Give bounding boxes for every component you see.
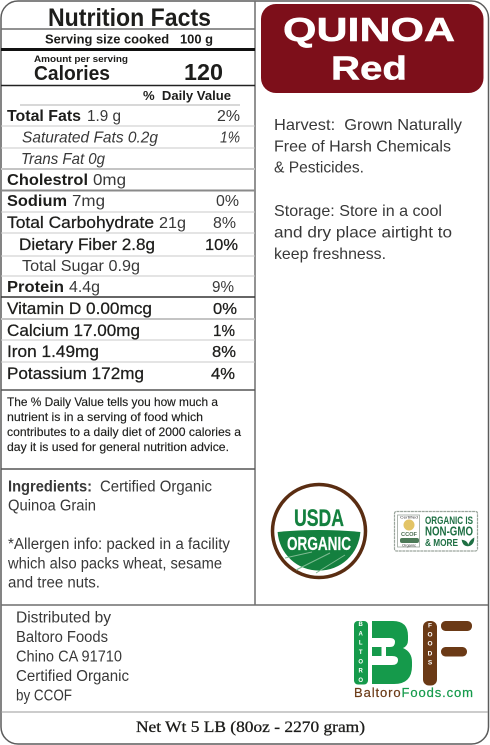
logo: baltoro foods: O	[427, 640, 433, 648]
logo: baltoro foods: A	[359, 632, 364, 638]
panel: ingredients: and tree nuts.	[8, 575, 100, 592]
row: cholesterol	[7, 172, 126, 189]
panel: ingredients: Quinoa Grain	[8, 498, 96, 515]
row: saturated fats	[22, 130, 240, 146]
harvest text: & Pesticides.	[274, 160, 364, 177]
banner: quinoa red: Red	[331, 50, 407, 86]
panel: ingredients	[7, 479, 230, 592]
badge: ccof organic non-gmo: ORGANIC IS	[425, 515, 473, 527]
daily value footnote	[7, 395, 241, 454]
logo: baltoro foods: D	[428, 650, 433, 658]
daily value footnote: The % Daily Value tells you how much a	[7, 395, 218, 409]
panel: nutrition facts	[1, 1, 255, 605]
storage text: Storage: Store in a cool	[274, 203, 442, 220]
logo: baltoro foods: O	[427, 632, 433, 638]
storage text: keep freshness.	[274, 246, 386, 263]
icon: usda organic seal: USDA	[294, 505, 344, 532]
serving size: Serving size cooked 100 g	[45, 32, 213, 46]
logo: baltoro foods: T	[359, 650, 363, 656]
panel: ingredients: Certified Organic	[100, 479, 212, 496]
row: sodium: Sodium	[7, 193, 67, 210]
distributor text: Distributed by	[16, 610, 111, 626]
heading: nutrition facts: Nutrition Facts	[48, 4, 211, 32]
row: total carbohydrate: 21g	[159, 215, 186, 232]
badge: ccof organic non-gmo: Organic	[402, 544, 416, 548]
calories: Calories	[34, 63, 110, 85]
row: total carbohydrate	[7, 214, 236, 232]
row: dietary fiber: 10%	[205, 237, 238, 254]
row: cholesterol: Cholestrol	[7, 172, 88, 189]
logo: baltoro foods	[354, 621, 473, 700]
harvest text: Free of Harsh Chemicals	[274, 139, 451, 156]
distributor text: Chino CA 91710	[16, 649, 122, 666]
row: iron: 8%	[212, 344, 236, 361]
badge: ccof organic non-gmo	[394, 512, 478, 551]
row: protein: 4.4g	[69, 279, 100, 296]
row: total fats: 1.9 g	[87, 108, 121, 125]
storage text: and dry place airtight to	[274, 225, 452, 242]
logo: baltoro foods: L	[359, 640, 363, 646]
row: calcium: Calcium 17.00mg	[7, 322, 140, 340]
row: dietary fiber: Dietary Fiber 2.8g	[19, 236, 155, 254]
panel: ingredients: which also packs wheat, sesame	[7, 556, 222, 573]
banner: quinoa red: QUINOA	[283, 11, 455, 48]
daily value footnote: contributes to a daily diet of 2000 calories a	[7, 425, 241, 439]
badge: ccof organic non-gmo: Certified	[400, 516, 418, 520]
row: total fats: 2%	[217, 108, 240, 125]
row: vitamin d	[7, 300, 237, 318]
row: calcium	[7, 322, 235, 340]
row: cholesterol: 0mg	[93, 172, 126, 189]
badge: ccof organic non-gmo: NON-GMO	[425, 524, 473, 538]
logo: baltoro foods: B	[359, 622, 364, 628]
divider above net weight	[1, 711, 488, 713]
distributor text: Baltoro Foods	[16, 629, 108, 646]
logo: baltoro foods: O	[358, 660, 363, 666]
row: vitamin d: Vitamin D 0.00mcg	[7, 300, 152, 318]
logo: baltoro foods: BaltoroFoods.com	[354, 685, 473, 700]
panel: ingredients: *Allergen info: packed in a facility	[8, 536, 230, 553]
row: dietary fiber	[19, 236, 238, 254]
row: sodium: 7mg	[72, 193, 105, 210]
row: sodium	[7, 193, 239, 210]
distributor text	[16, 610, 129, 705]
row: protein: Protein	[7, 279, 64, 296]
logo: baltoro foods: S	[428, 660, 433, 666]
row: total fats	[7, 108, 240, 125]
daily value heading: % Daily Value	[143, 88, 231, 103]
row: protein: 9%	[212, 279, 234, 296]
storage text	[274, 203, 452, 263]
logo: baltoro foods: F	[428, 622, 432, 630]
daily value footnote: nutrient is in a serving of food which	[7, 410, 203, 424]
row: total sugar: Total Sugar 0.9g	[22, 258, 140, 275]
calories: 120	[184, 59, 223, 85]
row: iron: Iron 1.49mg	[7, 343, 99, 361]
row: total fats: Total Fats	[7, 108, 81, 125]
row: total carbohydrate: 8%	[213, 215, 236, 232]
net weight: Net Wt 5 LB (80oz - 2270 gram)	[136, 719, 365, 736]
row: trans fat: Trans Fat 0g	[21, 151, 105, 168]
row: potassium: Potassium 172mg	[7, 365, 144, 383]
banner: quinoa red	[261, 4, 484, 93]
harvest text: Harvest: Grown Naturally	[274, 117, 462, 134]
calories	[34, 59, 223, 85]
row: saturated fats: Saturated Fats 0.2g	[22, 130, 158, 146]
row: potassium: 4%	[211, 366, 235, 383]
badge: ccof organic non-gmo: CCOF	[401, 532, 418, 538]
row: sodium: 0%	[216, 193, 239, 210]
row: saturated fats: 1%	[220, 130, 240, 146]
panel: ingredients: Ingredients:	[8, 479, 92, 496]
harvest text	[274, 117, 462, 177]
icon: usda organic seal	[272, 484, 366, 578]
amount per serving: Amount per serving	[34, 54, 128, 65]
logo: baltoro foods: O	[358, 678, 363, 684]
divider above distributor	[1, 604, 488, 606]
row: total carbohydrate: Total Carbohydrate	[7, 214, 154, 232]
row: vitamin d: 0%	[213, 301, 237, 318]
daily value footnote: day it is used for general nutrition advice.	[7, 440, 229, 454]
logo: baltoro foods: R	[359, 668, 364, 674]
distributor text: by CCOF	[16, 688, 72, 705]
row: iron	[7, 343, 236, 361]
row: protein	[7, 279, 234, 296]
row: calcium: 1%	[213, 323, 235, 340]
distributor text: Certified Organic	[16, 668, 129, 685]
badge: ccof organic non-gmo: & MORE	[425, 538, 458, 549]
row: potassium	[7, 365, 235, 383]
icon: usda organic seal: ORGANIC	[287, 533, 351, 554]
